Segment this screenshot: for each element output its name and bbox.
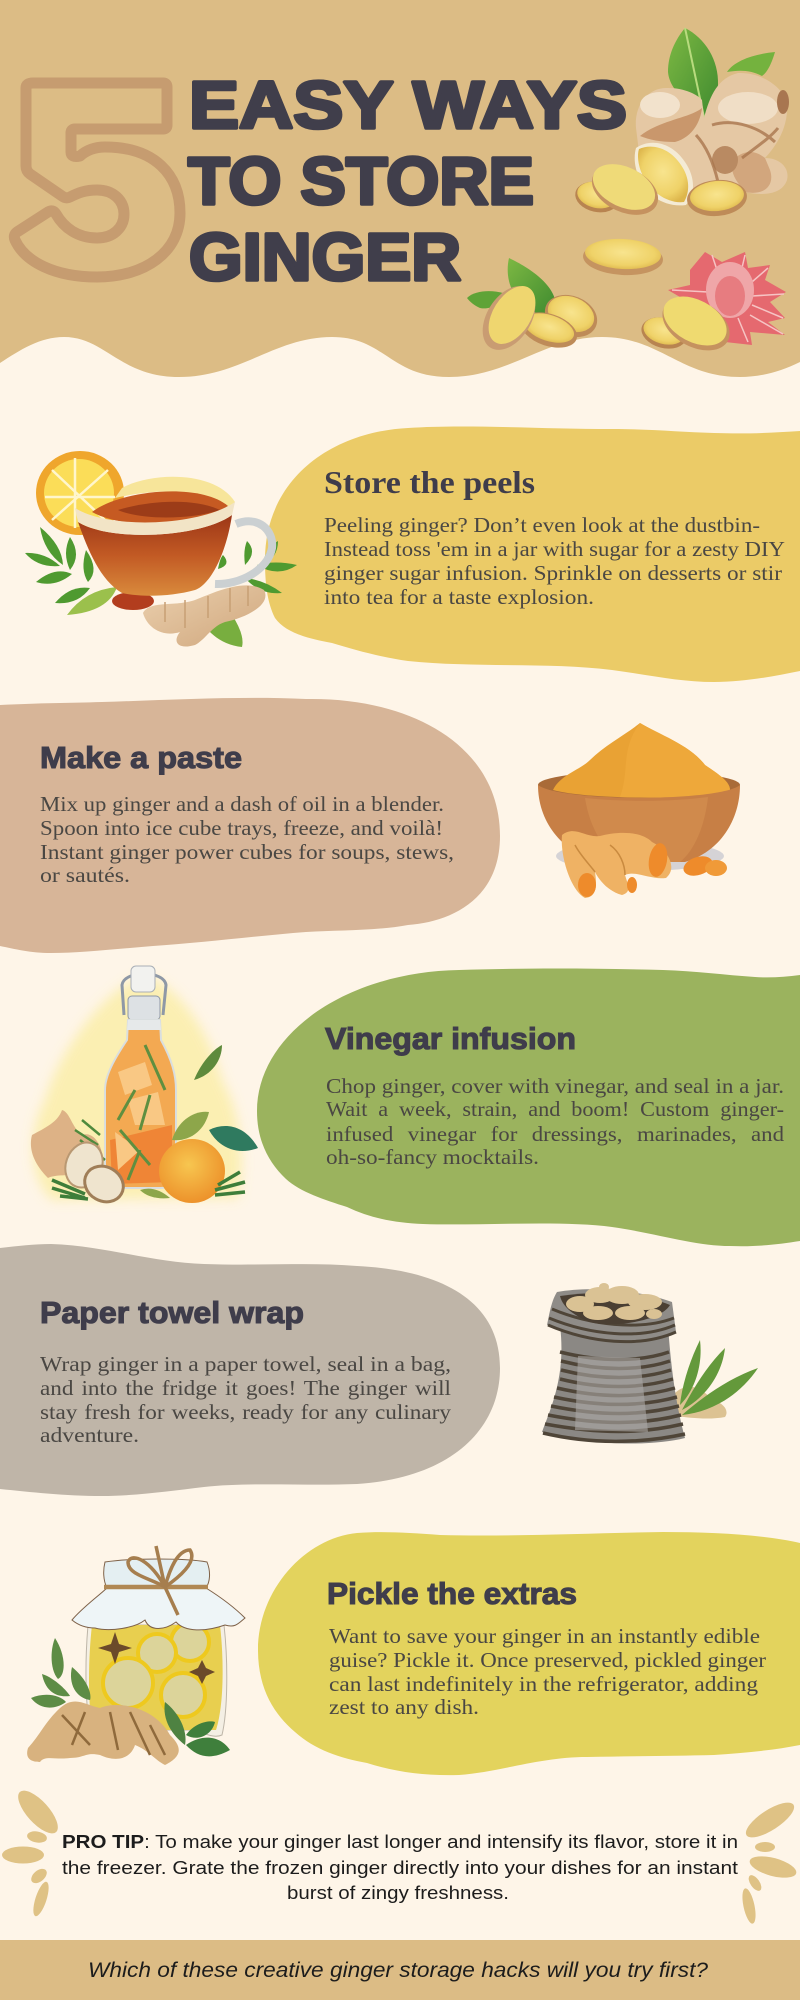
text: vinegar infusion body: infused vinegar for dressings, marinades, and	[326, 1122, 785, 1146]
panel: store the peels	[265, 426, 800, 682]
icon: pink flower with ginger slices	[638, 252, 786, 361]
blob: yellow	[265, 426, 800, 682]
text: store the peels body: Instead toss 'em in a jar with sugar for a zesty DIY	[324, 537, 785, 561]
text: vinegar infusion body: Chop ginger, cover with vinegar, and seal in a jar.	[326, 1074, 784, 1098]
heading: paper towel wrap: Paper towel wrap	[40, 1295, 304, 1330]
icon: jar of pickled ginger	[27, 1546, 245, 1765]
icon: bottle of ginger vinegar with orange	[31, 966, 258, 1209]
icon: loose ginger slice	[582, 237, 664, 277]
blob: yellow-green	[258, 1532, 800, 1775]
text: store the peels body: Peeling ginger? Don’t even look at the dustbin-	[324, 513, 760, 537]
header band with wavy edge	[0, 0, 800, 377]
text: paper towel wrap body: and into the fridge it goes! The ginger will	[40, 1376, 451, 1400]
icon: ginger root with leaves and slices	[572, 28, 789, 225]
title: EASY WAYS	[189, 68, 627, 143]
text: paper towel wrap body: Wrap ginger in a paper towel, seal in a bag,	[40, 1352, 451, 1376]
text: make a paste body: Spoon into ice cube trays, freeze, and voilà!	[40, 816, 443, 840]
text: paper towel wrap body: stay fresh for weeks, ready for any culinary	[40, 1400, 452, 1424]
text: vinegar infusion body: oh-so-fancy mocktails.	[326, 1145, 539, 1169]
heading: vinegar infusion: Vinegar infusion	[325, 1021, 576, 1056]
icon: left burst decoration	[2, 1785, 64, 1918]
panel: make a paste	[0, 698, 500, 953]
icon: cup of ginger lemon tea	[25, 451, 297, 647]
heading: pickle the extras: Pickle the extras	[327, 1576, 577, 1611]
text: pickle the extras body: can last indefinitely in the refrigerator, adding	[329, 1672, 759, 1696]
title	[188, 68, 627, 295]
text: make a paste body: Mix up ginger and a dash of oil in a blender.	[40, 792, 444, 816]
title: TO STORE	[188, 144, 534, 219]
text: pickle the extras body	[329, 1624, 766, 1719]
text: pickle the extras body: guise? Pickle it. Once preserved, pickled ginger	[329, 1648, 766, 1672]
footer band	[0, 1940, 800, 2000]
heading: store the peels: Store the peels	[324, 464, 535, 500]
title: GINGER	[189, 220, 461, 295]
icon: ginger slices with leaf	[467, 258, 604, 359]
text: pickle the extras body: Want to save your ginger in an instantly edible	[329, 1624, 760, 1648]
footer question: Which of these creative ginger storage hacks will you try first?	[88, 1959, 708, 1982]
text: pro tip: burst of zingy freshness.	[287, 1882, 509, 1903]
panel: vinegar infusion	[257, 968, 800, 1246]
text: paper towel wrap body	[40, 1352, 452, 1447]
text: make a paste body: Instant ginger power cubes for soups, stews,	[40, 840, 454, 864]
text: make a paste body	[40, 792, 454, 887]
text: pickle the extras body: zest to any dish.	[329, 1695, 479, 1719]
text: store the peels body: ginger sugar infusion. Sprinkle on desserts or stir	[324, 561, 782, 585]
text: vinegar infusion body	[326, 1074, 785, 1169]
blob: grey	[0, 1244, 500, 1496]
icon: bowl of ground ginger	[538, 723, 740, 898]
blob: tan	[0, 698, 500, 953]
text: vinegar infusion body: Wait a week, strain, and boom! Custom ginger-	[326, 1097, 784, 1121]
icon: right burst decoration	[740, 1796, 799, 1925]
text: paper towel wrap body: adventure.	[40, 1423, 139, 1447]
icon: sack of ginger	[542, 1283, 758, 1444]
heading: make a paste: Make a paste	[40, 740, 242, 775]
panel: pickle the extras	[258, 1532, 800, 1775]
panel: paper towel wrap	[0, 1244, 500, 1496]
text: make a paste body: or sautés.	[40, 863, 130, 887]
text: pro tip: the freezer. Grate the frozen ginger directly into your dishes for an instant	[62, 1857, 738, 1878]
text: store the peels body	[324, 513, 785, 609]
text: pro tip	[62, 1831, 738, 1903]
text: store the peels body: into tea for a taste explosion.	[324, 585, 594, 609]
big outlined number 5	[14, 83, 180, 277]
text: pro tip: PRO TIP : To make your ginger last longer and intensify its flavor, store it in	[62, 1831, 738, 1852]
blob: green	[257, 968, 800, 1246]
